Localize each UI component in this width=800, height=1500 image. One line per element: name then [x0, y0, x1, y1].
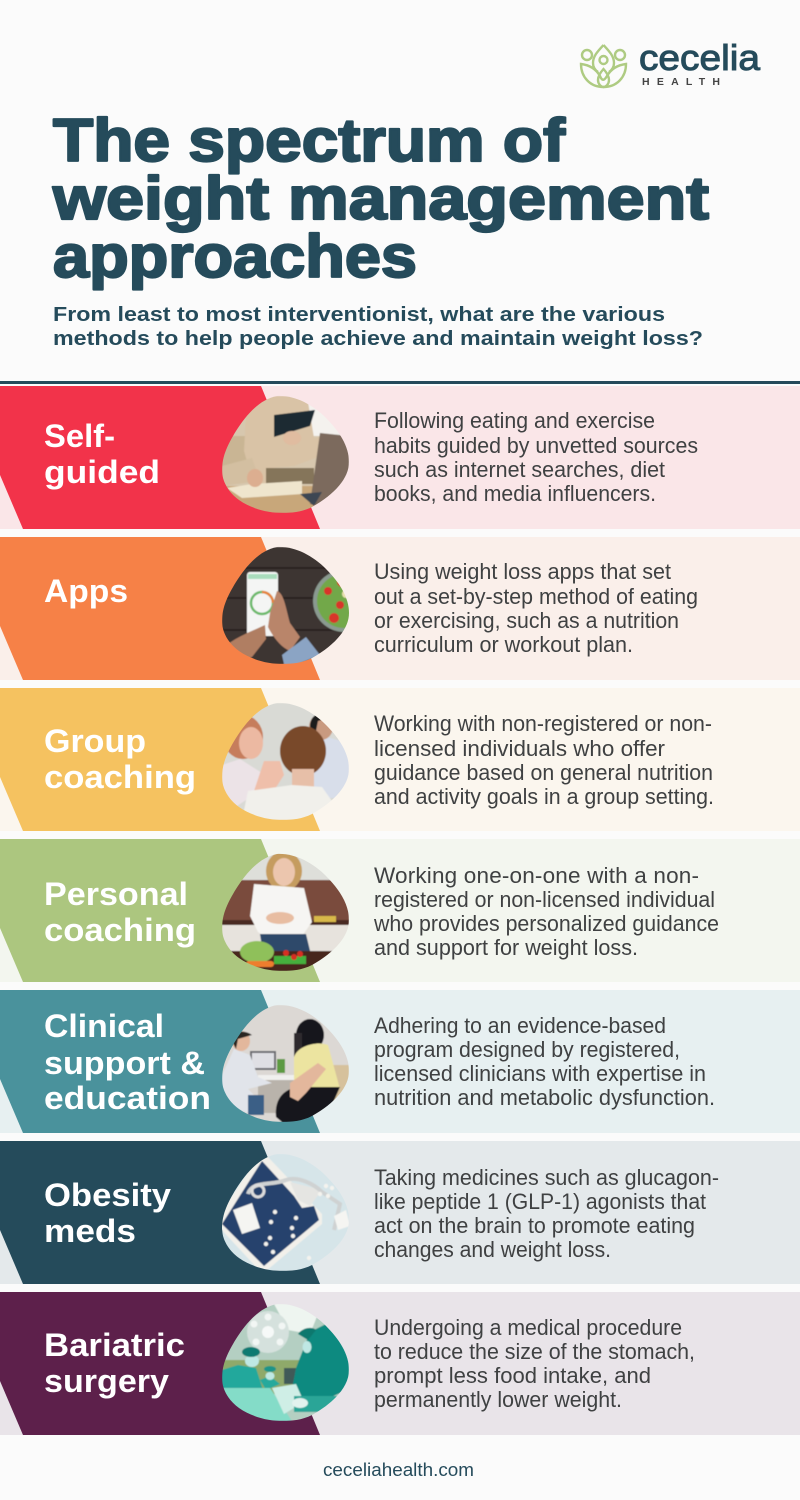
description: out a set-by-step method of eating	[374, 584, 698, 609]
description: habits guided by unvetted sources	[374, 433, 698, 458]
label: Group	[44, 723, 146, 759]
colour band	[0, 990, 320, 1133]
description: and activity goals in a group setting.	[374, 784, 714, 809]
panel: apps	[0, 537, 800, 680]
description: to reduce the size of the stomach,	[374, 1339, 695, 1364]
panel background	[0, 386, 800, 529]
description: act on the brain to promote eating	[374, 1213, 695, 1238]
description: who provides personalized guidance	[373, 911, 719, 936]
photo: doctor and patient	[222, 1005, 349, 1122]
panel: clinical support and education	[0, 990, 800, 1133]
description: and support for weight loss.	[374, 935, 638, 960]
panel background	[0, 1141, 800, 1284]
colour band	[0, 386, 320, 529]
label	[44, 723, 196, 795]
subtitle	[53, 303, 703, 350]
description	[374, 1013, 715, 1110]
description: Working with non-registered or non-	[374, 711, 712, 736]
label: education	[44, 1080, 211, 1116]
label	[44, 876, 196, 948]
label: coaching	[44, 912, 196, 948]
photo: phone app and salad	[222, 546, 349, 664]
label: Personal	[44, 876, 188, 912]
colour band	[0, 839, 320, 982]
description: Using weight loss apps that set	[374, 559, 672, 584]
label: coaching	[44, 759, 196, 795]
description	[374, 711, 714, 809]
logo: Cecelia Health	[581, 37, 761, 88]
description	[374, 408, 698, 506]
photo: scale, tape measure and pills	[218, 1154, 350, 1271]
photo: surgical team	[222, 1304, 349, 1421]
panel: obesity meds	[0, 1141, 800, 1284]
title	[52, 107, 709, 290]
title: approaches	[53, 223, 417, 290]
panel background	[0, 537, 800, 680]
icon: lotus	[581, 45, 626, 87]
description: prompt less food intake, and	[374, 1363, 651, 1388]
title: weight management	[52, 165, 709, 232]
description: books, and media influencers.	[374, 481, 656, 506]
description: changes and weight loss.	[374, 1237, 611, 1262]
photo: person studying	[222, 396, 349, 513]
description	[373, 863, 719, 960]
colour band	[0, 1292, 320, 1435]
description: Working one-on-one with a non-	[374, 863, 699, 888]
panel background	[0, 839, 800, 982]
photo: woman preparing vegetables	[222, 851, 349, 971]
panel: bariatric surgery	[0, 1292, 800, 1435]
panel background	[0, 688, 800, 831]
description: or exercising, such as a nutrition	[374, 608, 679, 633]
label: support &	[44, 1045, 205, 1081]
description: registered or non-licensed individual	[374, 887, 715, 912]
description: permanently lower weight.	[374, 1387, 622, 1412]
description: curriculum or workout plan.	[374, 632, 633, 657]
description	[374, 1315, 695, 1412]
description: licensed individuals who offer	[374, 736, 665, 761]
label: Obesity	[44, 1177, 171, 1213]
label: Apps	[44, 573, 128, 609]
title: The spectrum of	[53, 107, 566, 174]
wordmark: cecelia	[639, 37, 761, 78]
panel: personal coaching	[0, 839, 800, 982]
label	[44, 1177, 171, 1249]
label: surgery	[44, 1363, 169, 1399]
colour band	[0, 1141, 320, 1284]
description: such as internet searches, diet	[374, 457, 666, 482]
label	[44, 1008, 211, 1116]
colour band	[0, 537, 320, 680]
label: Self-	[44, 418, 115, 454]
label	[44, 418, 160, 490]
label: guided	[44, 454, 160, 490]
panel: group coaching	[0, 688, 800, 831]
description	[374, 1165, 719, 1262]
description: program designed by registered,	[374, 1037, 680, 1062]
description: like peptide 1 (GLP-1) agonists that	[374, 1189, 707, 1214]
label: Bariatric	[44, 1327, 185, 1363]
description: nutrition and metabolic dysfunction.	[374, 1085, 715, 1110]
panel background	[0, 1292, 800, 1435]
wordmark subtitle: HEALTH	[642, 76, 720, 88]
description: Taking medicines such as glucagon-	[374, 1165, 719, 1190]
subtitle: methods to help people achieve and maintain weight loss?	[53, 327, 703, 350]
description: Undergoing a medical procedure	[374, 1315, 682, 1340]
panel background	[0, 990, 800, 1133]
description: Adhering to an evidence-based	[374, 1013, 666, 1038]
subtitle: From least to most interventionist, what are the various	[53, 303, 665, 326]
description: guidance based on general nutrition	[374, 760, 713, 785]
footer: website: ceceliahealth.com	[323, 1460, 474, 1480]
description	[374, 559, 698, 657]
description: Following eating and exercise	[374, 408, 655, 433]
label	[44, 1327, 185, 1399]
top divider line	[0, 381, 800, 384]
panel: self-guided	[0, 386, 800, 529]
label: Clinical	[44, 1008, 164, 1044]
description: licensed clinicians with expertise in	[374, 1061, 706, 1086]
label: meds	[44, 1213, 136, 1249]
photo: group coaching session	[222, 703, 349, 820]
colour band	[0, 688, 320, 831]
